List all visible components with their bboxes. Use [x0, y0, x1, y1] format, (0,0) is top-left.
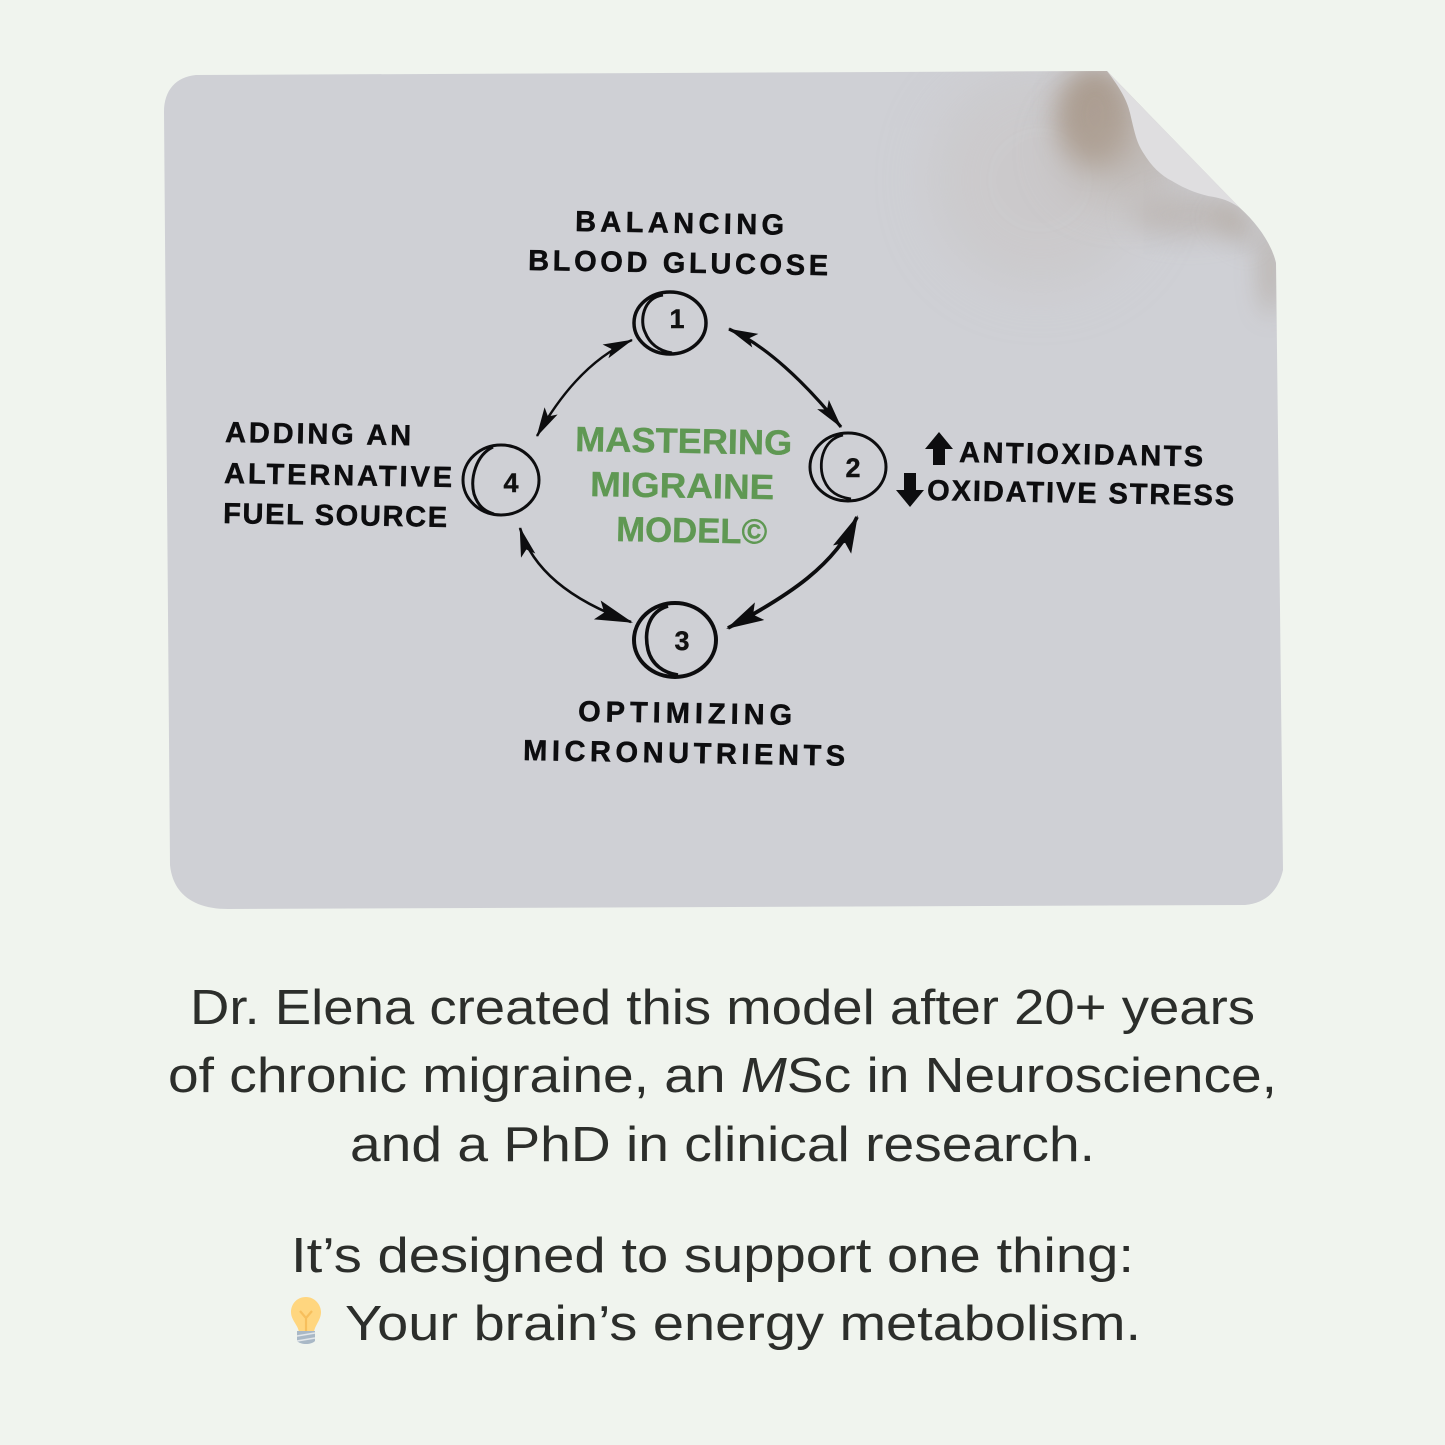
- text block: purpose statement: Your brain’s energy metabolism.: [345, 1297, 1141, 1351]
- icon: up arrow: [925, 432, 953, 465]
- icon: down arrow: [896, 473, 924, 507]
- label: adding an alternative fuel source: [223, 417, 452, 534]
- step 2 circle: [810, 433, 886, 501]
- arrow: step 4 to step 3: [520, 528, 631, 622]
- text block: model background: and a PhD in clinical research.: [350, 1118, 1095, 1172]
- step 1 circle: 1: [669, 304, 685, 334]
- label: optimizing micronutrients: [523, 696, 845, 773]
- step 1 circle: [634, 292, 706, 354]
- text block: model background: of chronic migraine, an MSc in Neuroscience,: [168, 1049, 1277, 1103]
- label: antioxidants and oxidative stress: ANTIOXIDANTS: [959, 437, 1203, 473]
- step 3 circle: 3: [674, 626, 690, 656]
- arrow: step 1 to step 4: [537, 340, 632, 436]
- step 2 circle: 2: [845, 453, 861, 483]
- center title: mastering migraine model: MIGRAINE: [590, 465, 775, 507]
- center title: mastering migraine model: MODEL©: [616, 510, 768, 552]
- curled corner flap: [1107, 71, 1240, 208]
- label: balancing blood glucose: BALANCING: [575, 206, 784, 242]
- step 3 circle: [634, 603, 716, 677]
- label: adding an alternative fuel source: ADDING AN: [225, 417, 411, 452]
- diagram: mastering migraine model: [223, 206, 1234, 773]
- icon: light bulb: [291, 1297, 321, 1344]
- text block: purpose statement: [291, 1229, 1141, 1351]
- center title: mastering migraine model: [575, 420, 793, 552]
- label: optimizing micronutrients: OPTIMIZING: [578, 696, 792, 732]
- step 4 circle: 4: [503, 468, 519, 498]
- text block: purpose statement: It’s designed to support one thing:: [291, 1229, 1134, 1283]
- label: adding an alternative fuel source: FUEL SOURCE: [223, 498, 447, 534]
- label: optimizing micronutrients: MICRONUTRIENTS: [523, 735, 845, 773]
- label: antioxidants and oxidative stress: OXIDATIVE STRESS: [927, 475, 1234, 512]
- label: balancing blood glucose: BLOOD GLUCOSE: [528, 245, 828, 282]
- label: antioxidants and oxidative stress: [896, 432, 1234, 512]
- panel: curled paper sheet: [164, 65, 1283, 909]
- center title: mastering migraine model: MASTERING: [575, 420, 793, 463]
- text block: model background: [168, 981, 1277, 1172]
- text block: model background: Dr. Elena created this model after 20+ years: [190, 981, 1255, 1035]
- label: adding an alternative fuel source: ALTERNATIVE: [224, 458, 452, 494]
- label: balancing blood glucose: [528, 206, 828, 282]
- step 4 circle: [463, 445, 539, 515]
- arrow: step 2 to step 3: [728, 517, 857, 628]
- arrow: step 1 to step 2: [729, 329, 841, 427]
